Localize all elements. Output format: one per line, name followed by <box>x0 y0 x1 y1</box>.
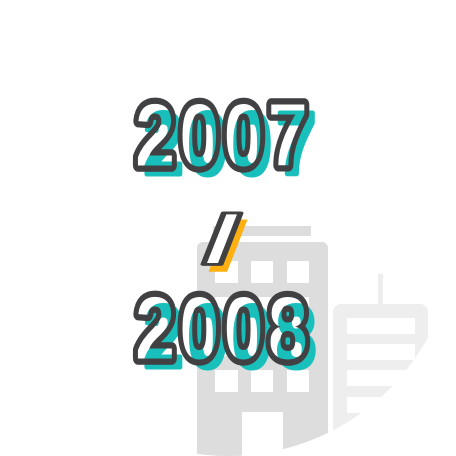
heading: 2007: 2007 <box>136 86 313 184</box>
heading: 2008: 2008 <box>144 287 321 386</box>
icon: small tower with antenna <box>333 274 428 430</box>
heading: slash: / <box>208 208 248 285</box>
icon: city buildings <box>197 226 428 456</box>
icon: tall office building <box>197 226 328 456</box>
heading: 2007: 2007 <box>144 94 321 193</box>
heading: 2008: 2008 <box>136 279 313 377</box>
heading: slash: / <box>202 201 242 278</box>
heading: slash: / <box>202 201 242 278</box>
infographic canvas <box>132 98 428 456</box>
